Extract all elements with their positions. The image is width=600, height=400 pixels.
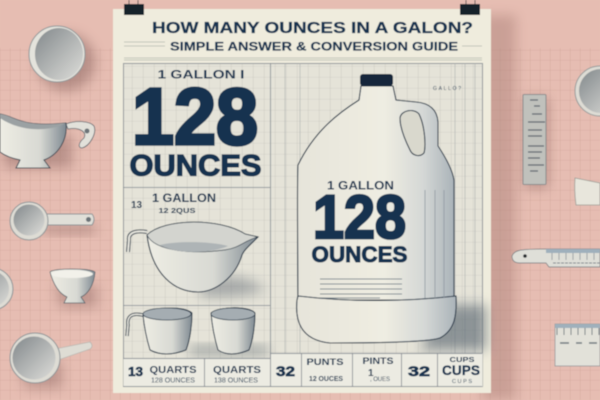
icon: round bowl top left: [29, 26, 95, 91]
cell: cups: [442, 355, 480, 385]
icon: conversion card right: [523, 94, 548, 188]
cell: punts: PUNTS: [306, 357, 344, 368]
panel: poster: [113, 0, 491, 393]
heading: 1 gallon bowl section: 1 GALLON: [152, 193, 216, 205]
cell: 32 second: 32: [408, 364, 430, 379]
cell: 13 quarts: QUARTS: [150, 364, 196, 376]
icon: measuring spoon with handle: [10, 202, 95, 240]
cell: punts: [306, 357, 344, 383]
cell: punts: 12 OUCES: [309, 376, 343, 383]
icon: ruler block bottom right: [555, 324, 600, 366]
callout: 1 gallon equals 128 ounces: 1 GALLON I: [158, 68, 244, 82]
icon: ruler with hole: [512, 249, 600, 267]
cell: quarts: [213, 364, 261, 384]
heading: 1 gallon bowl section: [131, 193, 216, 215]
jug label: 128 ounces: [312, 178, 408, 298]
icon: small footed cup: [50, 269, 97, 307]
cell: 13 quarts: 13: [128, 365, 143, 379]
callout: 1 gallon equals 128 ounces: OUNCES: [130, 150, 262, 182]
icon: partial bowl left edge: [0, 268, 13, 310]
panel: chart grid frame: [123, 63, 482, 387]
cell: quarts: QUARTS: [213, 364, 261, 376]
icon: jug cap: [360, 74, 393, 86]
cell: pints: [362, 356, 394, 383]
title: HOW MANY OUNCES IN A GALON?: [152, 20, 473, 37]
cell: cups: CUPS: [442, 363, 480, 378]
jug label: 128 ounces: 1 GALLON: [327, 178, 394, 192]
cell: pints: 1: [368, 368, 374, 379]
jug label: 128 ounces: 128: [313, 183, 406, 251]
panel: bottom conversion strip: [123, 353, 482, 387]
icon: binder clip left: [124, 0, 144, 15]
heading: 1 gallon bowl section: 12 2QUS: [158, 206, 196, 215]
icon: gravy boat: [0, 114, 95, 168]
icon: partial cup right: [575, 178, 600, 205]
cell: pints: PINTS: [362, 356, 394, 367]
cell: 13 quarts: [128, 364, 196, 384]
icon: quart cup with handle: [127, 308, 268, 355]
icon: quart cup without handle: [211, 308, 255, 354]
cell: quarts: 138 OUNCES: [214, 378, 258, 384]
icon: mixing bowl with spout: [128, 222, 266, 297]
jug label: 128 ounces: OUNCES: [312, 242, 408, 267]
cell: 13 quarts: 128 OUNCES: [151, 378, 195, 384]
icon: partial bowl right: [575, 66, 600, 116]
icon: measuring cup with long handle: [10, 333, 92, 388]
cell: pints: , OUES: [370, 377, 390, 383]
cell: cups: CUPS: [450, 355, 474, 364]
icon: gallon jug: [297, 74, 486, 350]
label: small gallon text: GALLO?: [433, 86, 461, 92]
cell: cups: CUPS: [452, 379, 472, 385]
icon: binder clip right: [460, 0, 480, 15]
callout: 1 gallon equals 128 ounces: 128: [132, 72, 258, 161]
cell: 32: 32: [276, 364, 295, 379]
subtitle: SIMPLE ANSWER & CONVERSION GUIDE: [170, 40, 458, 54]
heading: 1 gallon bowl section: 13: [131, 200, 143, 211]
